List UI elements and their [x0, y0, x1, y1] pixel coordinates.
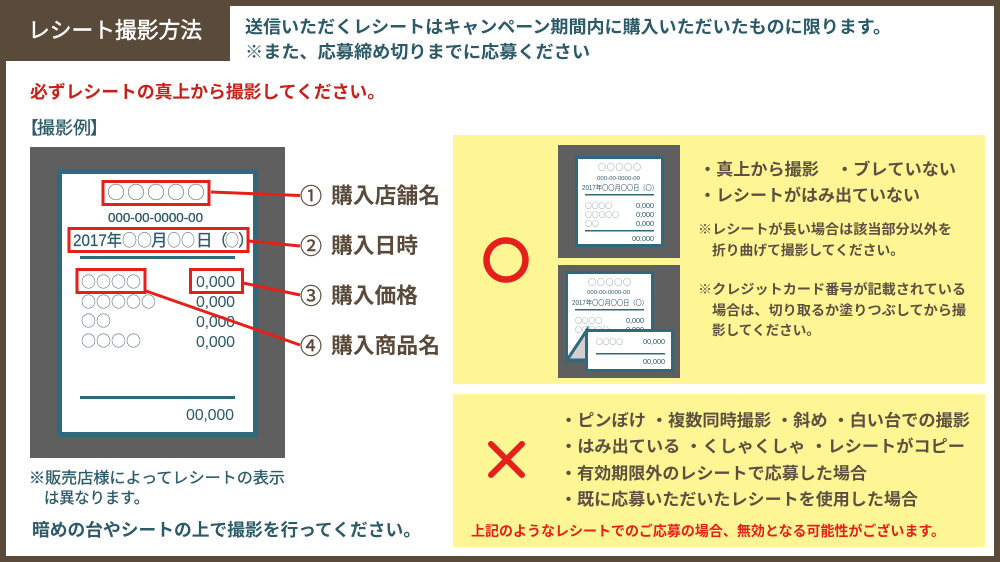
- date line: [73, 227, 254, 251]
- panel: correct examples: [453, 135, 985, 384]
- item rows: 0,000: [196, 314, 235, 331]
- incorrect conditions: ・有効期限外のレシートで応募した場合: [560, 464, 868, 483]
- example heading: 【: [21, 115, 38, 140]
- thumbnail: folded receipt: ○○○○○: [588, 277, 631, 288]
- item rows: 0,000: [196, 274, 235, 291]
- fold triangle: [567, 330, 587, 360]
- thumbnail: folded receipt: ○○○○○: [575, 325, 609, 335]
- thumbnail: folded receipt: ○○○○: [575, 316, 602, 326]
- thumbnail: flat receipt: ○○○○: [585, 201, 612, 211]
- thumbnail: flat receipt: ○○: [585, 219, 599, 229]
- callout labels: 購入価格: [331, 284, 418, 308]
- panel: incorrect examples: [453, 394, 985, 547]
- thumbnail: flat receipt: ○○○○○: [585, 210, 619, 220]
- item rows: 0,000: [196, 334, 235, 351]
- correct notes: 場合は、切り取るか塗りつぶしてから撮: [712, 302, 967, 318]
- panel: example receipt: [30, 147, 285, 458]
- thumbnail: folded receipt: 000-00-0000-00: [587, 290, 630, 296]
- thumbnail: folded receipt: 0,000: [626, 316, 644, 325]
- folded flap: [586, 330, 672, 370]
- thumbnail: folded receipt: 00,000: [643, 357, 665, 366]
- thumbnail: flat receipt: 00,000: [632, 234, 654, 243]
- footnote: は異なります。: [44, 489, 149, 507]
- footnote: [29, 469, 285, 507]
- date line: 日: [196, 232, 212, 250]
- item rows: ○○○○: [81, 330, 141, 351]
- incorrect conditions: ・はみ出ている ・くしゃくしゃ ・レシートがコピー: [560, 436, 965, 456]
- correct notes: ※レシートが長い場合は該当部分以外を: [698, 221, 952, 237]
- callout labels: ②: [300, 229, 322, 261]
- incorrect conditions: ・既に応募いただいたレシートを使用した場合: [560, 490, 919, 509]
- title: レシート撮影方法: [28, 18, 202, 43]
- item rows: 0,000: [196, 294, 235, 311]
- callout labels: 購入日時: [331, 234, 418, 258]
- callout labels: ③: [300, 279, 322, 311]
- date line: ○○: [122, 227, 152, 251]
- thumbnail: flat receipt: ○○○○○: [598, 162, 641, 173]
- red instruction heading: 必ずレシートの真上から撮影してください。: [30, 82, 385, 102]
- example heading: 】: [90, 115, 108, 140]
- correct notes: [698, 221, 967, 338]
- correct conditions: ・真上から撮影 ・ブレていない: [699, 159, 956, 179]
- example heading: 撮影例: [37, 118, 91, 138]
- dark background advice: 暗めの台やシートの上で撮影を行ってください。: [32, 520, 421, 540]
- footnote: ※販売店様によってレシートの表示: [29, 469, 285, 487]
- thumbnail: flat receipt: [558, 145, 680, 258]
- item rows: [81, 271, 235, 351]
- notice text: ※また、応募締め切りまでに応募ください: [245, 42, 590, 62]
- example heading: [21, 115, 108, 140]
- thumbnail: flat receipt: 0,000: [636, 210, 654, 219]
- incorrect conditions: [560, 410, 971, 509]
- store name placeholder: ○○○○○: [107, 179, 205, 205]
- callout labels: ①: [300, 179, 322, 211]
- correct notes: 折り曲げて撮影してください。: [712, 242, 904, 258]
- correct notes: 影してください。: [712, 322, 820, 338]
- thumbnail: folded receipt: 2017年〇〇月〇〇日（〇）: [572, 298, 648, 307]
- callout labels: 購入商品名: [331, 334, 440, 358]
- highlight boxes and leader lines: [69, 182, 300, 345]
- rule: [80, 256, 235, 259]
- callout labels: [300, 179, 440, 361]
- callout labels: 購入店舗名: [331, 184, 440, 208]
- thumbnail: folded receipt: ○○○○: [596, 337, 623, 347]
- thumbnail: flat receipt: 0,000: [636, 201, 654, 210]
- incorrect conditions: ・ピンぼけ ・複数同時撮影 ・斜め ・白い台での撮影: [560, 410, 971, 430]
- item rows: ○○○○: [81, 271, 141, 292]
- thumbnail: folded receipt: 00,000: [643, 337, 665, 346]
- thumbnail: flat receipt: 0,000: [636, 219, 654, 228]
- date line: ○○: [167, 227, 195, 251]
- item rows: ○○: [81, 310, 111, 331]
- correct conditions: ・レシートがはみ出ていない: [699, 185, 920, 205]
- icon: circle: [486, 240, 526, 280]
- notice text: 送信いただくレシートはキャンペーン期間内に購入いただいたものに限ります。: [245, 17, 891, 37]
- thumbnail: flat receipt: 2017年〇〇月〇〇日（〇）: [582, 183, 658, 192]
- receipt paper: [60, 172, 256, 434]
- thumbnail: folded receipt: [558, 265, 680, 378]
- item rows: ○○○○○: [81, 291, 156, 312]
- dark backing sheet: [30, 147, 285, 458]
- notice text: [245, 17, 891, 62]
- thumbnail: flat receipt: 000-00-0000-00: [597, 176, 640, 182]
- date line: ○: [225, 227, 239, 251]
- date line: ）: [238, 227, 254, 251]
- date line: （: [211, 227, 228, 251]
- total: 00,000: [186, 407, 234, 424]
- total rule: [80, 396, 235, 399]
- callout labels: ④: [300, 329, 322, 361]
- warning text: 上記のようなレシートでのご応募の場合、無効となる可能性がございます。: [471, 523, 945, 539]
- correct notes: ※クレジットカード番号が記載されている: [698, 281, 966, 297]
- yellow background: [453, 394, 985, 547]
- yellow background: [453, 135, 985, 384]
- thumbnail: folded receipt: 0,000: [626, 325, 644, 334]
- correct conditions: [699, 159, 956, 205]
- icon: cross: [491, 444, 522, 475]
- phone number: 000-00-0000-00: [108, 210, 203, 225]
- date line: 2017年: [73, 231, 122, 250]
- date line: 月: [151, 232, 168, 250]
